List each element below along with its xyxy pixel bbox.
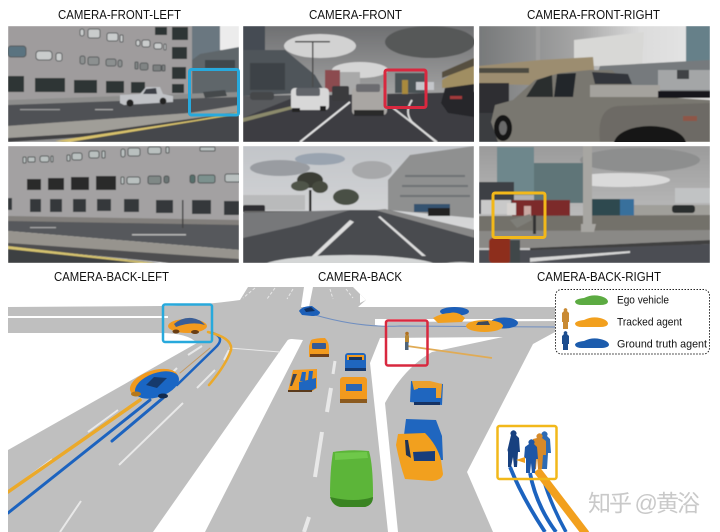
trajectories: pedestrians [510,467,586,532]
callout: blue highlight box on map [163,304,212,342]
callout: yellow highlight box on map [498,426,556,479]
panel: front left camera photo [8,26,240,142]
title: camera front right: CAMERA-FRONT-RIGHT [527,8,660,22]
trajectory: pedestrian orange path [407,346,492,358]
legend label: ego vehicle: Ego vehicle [617,294,669,306]
panel: back camera photo [243,146,474,263]
icon: roadside tree [291,172,359,213]
title: camera front left: CAMERA-FRONT-LEFT [58,8,181,22]
icon: grey pickup truck [490,70,710,142]
watermark: 知乎 @黄浴 [588,490,700,516]
panel: front camera photo [243,26,475,142]
icon: ego vehicle [575,295,608,305]
title: camera back left: CAMERA-BACK-LEFT [54,270,169,284]
trajectory: blue car thin path [315,315,555,327]
panel: back right camera photo [479,146,710,263]
road network [8,287,555,532]
trajectories: left car [8,332,231,513]
icon: ground truth pedestrian [562,331,569,350]
callout: red highlight box on front [385,70,426,108]
car: right blue car with orange patches [410,381,443,405]
icon: white pickup truck [120,87,173,107]
icon: tracked pedestrian [562,308,569,329]
car: centre right orange car [340,377,367,403]
callout: blue highlight box on front left [190,70,238,115]
icon: dark car right [441,84,474,117]
legend [556,290,710,354]
legend label: ground truth agent: Ground truth agent [617,338,707,350]
pedestrians: in yellow box [507,430,551,473]
car: centre left mixed car [288,369,317,392]
title: camera back: CAMERA-BACK [318,270,403,284]
car: top right tracked and ground truth cars [433,307,518,332]
panel: back left camera photo [8,146,241,263]
car: left intersection tracked car [168,318,207,334]
car: centre right blue car [345,353,366,371]
panel: tracking map [8,287,586,532]
car: top centre blue car [299,306,320,316]
pedestrian: in red box [405,332,409,350]
car: centre orange car [309,338,329,357]
icon: silver car ahead [352,84,387,116]
callout: red highlight box on map [386,320,428,366]
title: camera front: CAMERA-FRONT [309,8,402,22]
callout: yellow highlight box on back right [493,193,545,238]
icon: ground truth car [575,338,609,348]
car: large blue and orange car [396,419,443,481]
car: left lane blue and orange car [130,368,179,399]
panel: front right camera photo [479,26,710,142]
icon: tracked car [575,317,608,327]
icon: white car left [291,88,329,112]
icon: pedestrians [507,203,536,234]
legend label: tracked agent: Tracked agent [617,316,682,328]
car: ego green car [330,450,373,507]
title: camera back right: CAMERA-BACK-RIGHT [537,270,661,284]
